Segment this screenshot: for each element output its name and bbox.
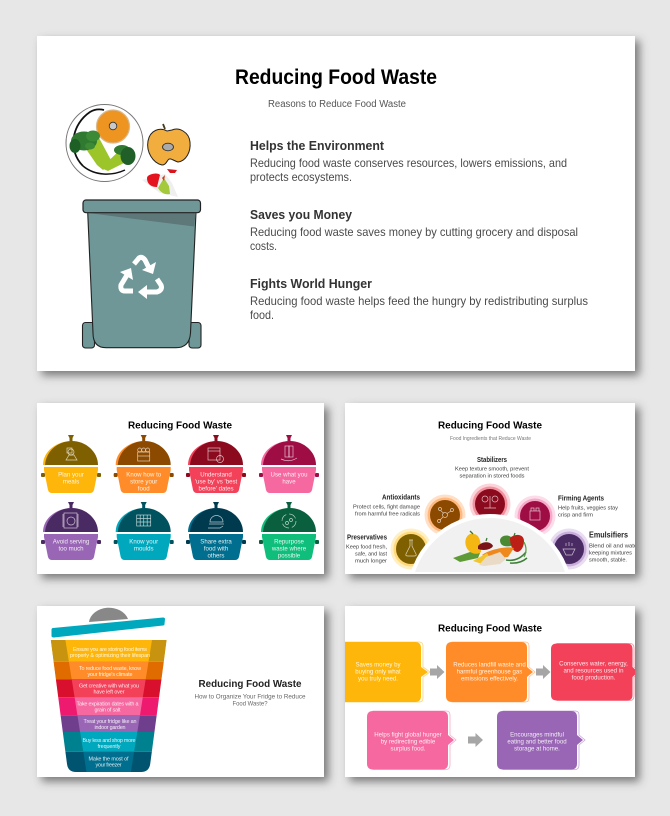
cloche: understand use by vs best before dates: Understand	[200, 472, 232, 478]
icon: recycle symbol	[120, 257, 162, 299]
icon: apple fragments	[142, 169, 178, 197]
layer labels: Take expiration dates with a	[76, 702, 138, 708]
cloche: know your moulds	[114, 502, 174, 560]
text block: antioxidants	[353, 494, 421, 518]
icon: bin lid with handle	[52, 608, 165, 638]
text block: emulsifiers: smooth, stable.	[589, 558, 627, 564]
cloche: know how to store your food: Know how to	[126, 472, 162, 478]
text block: emulsifiers	[589, 532, 635, 562]
layer labels	[70, 647, 150, 768]
heading: Reducing Food Waste	[198, 678, 302, 690]
callout: mindful eating: eating and better food	[507, 738, 567, 746]
cloche: repurpose waste where possible: possible	[278, 552, 301, 560]
cloche: know your moulds: Know your	[129, 538, 158, 546]
callout: reduces landfill waste: harmful greenhouse gas	[457, 668, 522, 676]
text block: emulsifiers: keeping mixtures	[589, 550, 632, 556]
icon: preservatives circle	[390, 528, 432, 570]
cloche: use what you have: Use what you	[271, 472, 307, 478]
cloche: share extra food with others	[186, 502, 246, 560]
callout: conserves water	[551, 644, 640, 700]
cloche: avoid serving too much	[41, 502, 101, 560]
icon: stabilizers circle	[470, 484, 510, 516]
layer labels: properly & optimizing their lifespan	[70, 653, 150, 659]
callout: conserves water: food production.	[572, 674, 616, 682]
subtitle: Food Ingredients that Reduce Waste	[450, 436, 531, 442]
layer labels: frequently	[98, 744, 121, 750]
arrow: step 2 to 3	[536, 665, 550, 679]
callout: saves money: Saves money by	[355, 662, 401, 668]
text block: preservatives	[346, 534, 387, 564]
panel: benefits flow slide	[345, 606, 640, 777]
heading: Reducing Food Waste	[438, 622, 542, 634]
text block: helps the environment: protects ecosystems.	[250, 170, 352, 184]
layer labels: indoor garden	[94, 725, 126, 731]
subtitle	[194, 694, 306, 708]
callout: saves money: you truly need.	[358, 676, 398, 682]
panel: food ingredients slide	[343, 401, 646, 585]
heading: Reducing Food Waste	[128, 420, 232, 432]
cloche: plan your meals: meals	[63, 478, 79, 486]
cloche: understand use by vs best before dates	[186, 435, 246, 493]
cloche: repurpose waste where possible	[259, 502, 319, 560]
text block: emulsifiers: Blend oil and water,	[589, 544, 641, 550]
text block: preservatives: Preservatives	[347, 534, 387, 542]
text block: helps the environment: Helps the Environment	[250, 138, 385, 153]
callout: saves money: buying only what	[355, 668, 401, 676]
cloche: plan your meals	[41, 435, 101, 493]
text block: antioxidants: from harmful free radicals	[355, 512, 420, 518]
text block: preservatives: much longer	[355, 558, 387, 564]
text block: saves you money: Saves you Money	[250, 207, 353, 222]
cloche: repurpose waste where possible: waste where	[271, 546, 307, 552]
subtitle: Reasons to Reduce Food Waste	[268, 99, 406, 110]
arrow: step 1 to 2	[430, 665, 444, 679]
text block: stabilizers	[455, 457, 529, 480]
cloche: avoid serving too much: Avoid serving	[53, 538, 89, 546]
icon: firming agents circle	[514, 496, 556, 536]
layer labels: your fridge's climate	[88, 672, 132, 678]
cloche: know how to store your food	[114, 435, 174, 493]
layer labels: Ensure you are storing food items	[73, 647, 147, 653]
text block: helps the environment: Reducing food waste conserves resources, lowers emissions, and	[250, 156, 567, 170]
text block: saves you money: costs.	[250, 239, 277, 253]
subtitle: How to Organize Your Fridge to Reduce	[194, 694, 306, 700]
cloche: know how to store your food: store your	[130, 478, 157, 486]
callout: fights global hunger: surplus food.	[391, 746, 426, 752]
callout: reduces landfill waste: Reduces landfill waste and	[453, 662, 526, 668]
cloche: know how to store your food: food	[138, 486, 150, 492]
callout: reduces landfill waste	[446, 642, 535, 702]
callout: mindful eating: storage at home.	[514, 746, 560, 752]
text block: firming agents: Firming Agents	[558, 496, 604, 502]
callout: fights global hunger: by redirecting edible	[381, 738, 436, 746]
text block: fights world hunger	[250, 276, 588, 322]
icon: plate with donut and broccoli	[66, 104, 143, 182]
icon: bitten apple	[148, 124, 190, 165]
layer labels: have left over	[94, 690, 125, 696]
text block: fights world hunger: Reducing food waste helps feed the hungry by redistributing surplus	[250, 294, 588, 308]
icon: recycling bin	[82, 200, 201, 348]
semicircle with vegetables	[412, 514, 568, 572]
text block: preservatives: Keep food fresh,	[346, 544, 387, 550]
icon: antioxidants circle	[424, 494, 466, 536]
layer labels: Make the most of	[88, 756, 129, 762]
text block: antioxidants: Antioxidants	[382, 494, 420, 502]
callout: mindful eating: Encourages mindful	[510, 732, 564, 738]
panel: cloche tips slide	[37, 403, 324, 574]
layer labels: grain of salt	[94, 708, 121, 714]
layer labels: Treat your fridge like an	[84, 719, 136, 725]
callout: conserves water: Conserves water, energy,	[559, 660, 628, 668]
layer labels: your freezer	[96, 762, 122, 768]
text block: saves you money	[250, 207, 578, 253]
cloche: share extra food with others: food with	[204, 546, 228, 552]
text block: stabilizers: separation in stored foods	[460, 474, 525, 480]
panel: fridge bin slide	[37, 606, 324, 777]
heading: Reducing Food Waste	[438, 420, 542, 432]
cloche: use what you have	[259, 435, 319, 493]
text block: fights world hunger: Fights World Hunger	[250, 276, 372, 291]
text block: firming agents: crisp and firm	[558, 512, 593, 518]
cloche: plan your meals: Plan your	[58, 472, 84, 478]
cloche: share extra food with others: others	[208, 552, 224, 560]
panel: main slide	[37, 36, 635, 371]
text block: preservatives: safe, and last	[355, 552, 387, 558]
text block: stabilizers: Stabilizers	[477, 457, 507, 464]
cloche: avoid serving too much: too much	[58, 546, 84, 552]
icon: emulsifiers circle	[548, 528, 590, 570]
text block: emulsifiers: Emulsifiers	[589, 530, 628, 540]
cloche: understand use by vs best before dates: 'use by' vs 'best	[195, 478, 238, 486]
callout: fights global hunger: Helps fight global hunger	[374, 732, 442, 738]
text block: stabilizers: Keep texture smooth, prevent	[455, 466, 529, 472]
callout: conserves water: and resources used in	[564, 668, 623, 674]
cloche: know your moulds: moulds	[134, 546, 154, 552]
callout: mindful eating	[497, 711, 585, 770]
text block: saves you money: Reducing food waste saves money by cutting grocery and disposal	[250, 225, 578, 239]
title: Reducing Food Waste	[235, 66, 437, 89]
layer labels: To reduce food waste, know	[79, 666, 141, 672]
text block: helps the environment	[250, 138, 567, 184]
chart: layered bin of tips	[51, 640, 167, 772]
cloche: understand use by vs best before dates: before' dates	[198, 486, 234, 492]
callout: saves money	[345, 642, 430, 702]
cloche: use what you have: have	[282, 478, 296, 486]
text block: firming agents: Help fruits, veggies stay	[558, 506, 618, 512]
subtitle: Food Waste?	[232, 700, 268, 708]
layer labels: Get creative with what you	[79, 684, 139, 690]
cloche: repurpose waste where possible: Repurpose	[274, 538, 305, 546]
text block: antioxidants: Protect cells, fight damage	[353, 504, 421, 510]
icon: vegetables	[453, 531, 527, 566]
callout: reduces landfill waste: emissions effectively.	[461, 676, 518, 682]
callout: fights global hunger	[367, 711, 456, 770]
cloche: share extra food with others: Share extra	[200, 538, 232, 546]
layer labels: Buy less and shop more	[82, 738, 136, 744]
text block: fights world hunger: food.	[250, 308, 274, 322]
text block: firming agents	[558, 496, 618, 518]
arrow: step 4 to 5	[468, 733, 483, 747]
